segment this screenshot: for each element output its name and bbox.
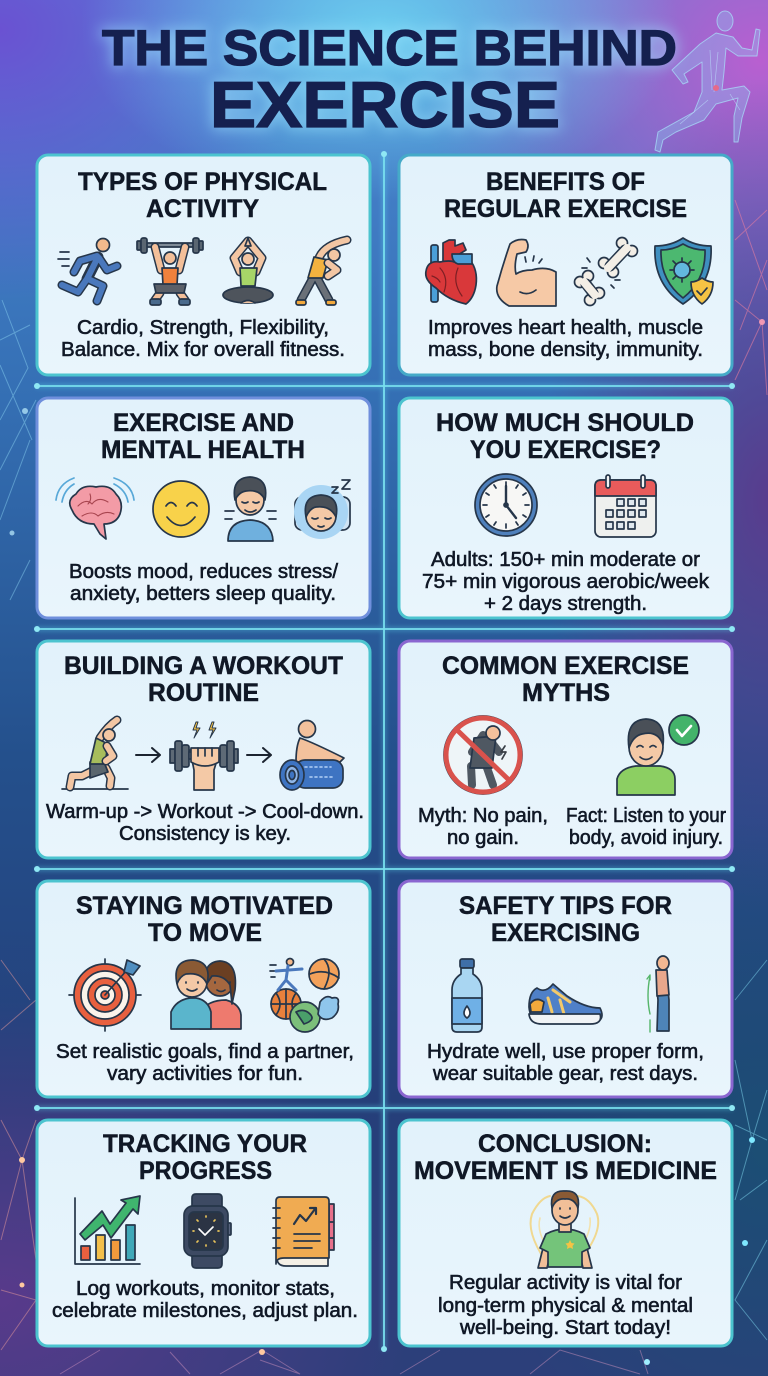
panel: tracking your progress (37, 1120, 370, 1346)
heading: how much: YOU EXERCISE? (470, 436, 661, 464)
panel: benefits of regular exercise (399, 155, 732, 375)
heading: safety tips: SAFETY TIPS FOR (459, 892, 672, 920)
panel: common exercise myths (399, 641, 732, 858)
heading: staying motivated: STAYING MOTIVATED (76, 892, 333, 920)
body text (61, 317, 345, 361)
body text (428, 317, 703, 361)
icon: smiley (153, 481, 209, 537)
body text: myth: Myth: No pain, (418, 805, 548, 827)
icon: varied sports (270, 958, 339, 1032)
heading: staying motivated (76, 892, 333, 947)
icon: water bottle (452, 959, 482, 1032)
title (102, 20, 677, 141)
body text: celebrate milestones, adjust plan. (52, 1300, 358, 1322)
icon: flexed bicep (497, 240, 556, 306)
heading: mental health (101, 409, 305, 464)
panel: safety tips (399, 881, 732, 1097)
icon: brain with waves (56, 478, 134, 539)
heading: mental health: EXERCISE AND (113, 409, 294, 437)
body text: Balance. Mix for overall fitness. (61, 339, 345, 361)
heading: benefits: REGULAR EXERCISE (444, 195, 687, 223)
body text: Boosts mood, reduces stress/ (69, 561, 338, 583)
title: EXERCISE (210, 68, 560, 141)
body text (438, 1272, 693, 1339)
body text: Hydrate well, use proper form, (427, 1041, 704, 1063)
icon: yoga pose (223, 238, 273, 303)
body text: fact: Fact: Listen to your (566, 805, 726, 827)
icon: calendar (595, 475, 656, 537)
icon: sleeping head (294, 480, 350, 539)
body text: Log workouts, monitor stats, (76, 1278, 335, 1300)
panel: building a workout routine (37, 641, 370, 858)
heading: conclusion (414, 1130, 717, 1185)
panel: how much should you exercise (399, 398, 732, 618)
heading: myths: MYTHS (522, 679, 610, 707)
heading: types of physical activity: TYPES OF PHYSICAL (78, 168, 327, 196)
anatomical runner figure (655, 11, 760, 152)
body text (46, 801, 364, 845)
body text: 75+ min vigorous aerobic/week (422, 571, 710, 593)
heading: workout routine: ROUTINE (148, 679, 259, 707)
icon: clock (475, 474, 537, 536)
panel: conclusion (399, 1120, 732, 1346)
icon: foam roller cooldown (280, 720, 344, 790)
body text: fact (566, 805, 726, 849)
heading: tracking: PROGRESS (139, 1157, 272, 1185)
icon: progress chart (75, 1196, 140, 1264)
icon: runner (58, 238, 117, 301)
heading: myths: COMMON EXERCISE (442, 652, 689, 680)
heading: myths (442, 652, 689, 707)
heading: tracking (103, 1130, 307, 1185)
icon: no pain prohibited (444, 716, 522, 794)
panel: exercise and mental health (37, 398, 370, 618)
arrow (136, 748, 160, 762)
icon: side stretch (296, 240, 347, 305)
icon: smartwatch (184, 1194, 231, 1268)
title: THE SCIENCE BEHIND (102, 20, 677, 76)
body text: myth (418, 805, 548, 849)
heading: safety tips: EXERCISING (491, 919, 640, 947)
heading: how much (436, 409, 694, 464)
icon: calm person (225, 477, 276, 541)
icon: progress notebook (273, 1197, 334, 1266)
heading: how much: HOW MUCH SHOULD (436, 409, 694, 437)
heading: mental health: MENTAL HEALTH (101, 436, 305, 464)
icon: happy person with check (617, 715, 699, 795)
body text: mass, bone density, immunity. (428, 339, 703, 361)
body text: long-term physical & mental (438, 1295, 693, 1317)
heading: benefits (444, 168, 687, 223)
body text: fact: body, avoid injury. (569, 827, 723, 849)
icon: running shoe (529, 984, 602, 1024)
panel: staying motivated (37, 881, 370, 1097)
body text (427, 1041, 704, 1085)
body text (52, 1278, 358, 1322)
body text: well-being. Start today! (459, 1317, 671, 1339)
heading: conclusion: MOVEMENT IS MEDICINE (414, 1157, 717, 1185)
icon: workout partners (171, 960, 241, 1029)
icon: target with arrow (69, 959, 141, 1031)
body text: anxiety, betters sleep quality. (70, 583, 336, 605)
body text: Adults: 150+ min moderate or (431, 549, 700, 571)
body text: Consistency is key. (119, 823, 291, 845)
body text (422, 549, 710, 615)
icon: bones (574, 238, 638, 306)
heading: staying motivated: TO MOVE (148, 919, 262, 947)
icon: posture check (647, 956, 669, 1032)
icon: heart (426, 240, 476, 304)
title: EXERCISE (210, 68, 560, 141)
title: THE SCIENCE BEHIND (102, 20, 677, 76)
arrow (247, 748, 271, 762)
body text (56, 1041, 354, 1085)
body text: Cardio, Strength, Flexibility, (77, 317, 329, 339)
heading: conclusion: CONCLUSION: (478, 1130, 652, 1158)
heading: benefits: BENEFITS OF (486, 168, 645, 196)
icon: immunity shield (655, 238, 713, 304)
body text: + 2 days strength. (484, 593, 647, 615)
heading: tracking: TRACKING YOUR (103, 1130, 307, 1158)
body text: Improves heart health, muscle (428, 317, 703, 339)
body text: vary activities for fun. (107, 1063, 303, 1085)
body text (69, 561, 338, 605)
body text: Regular activity is vital for (449, 1272, 682, 1294)
heading: workout routine: BUILDING A WORKOUT (64, 652, 343, 680)
heading: types of physical activity (78, 168, 327, 223)
panel: types of physical activity (37, 155, 370, 375)
heading: workout routine (64, 652, 343, 707)
glowing grid connectors (34, 151, 735, 1352)
heading: safety tips (459, 892, 672, 947)
icon: healthy person with halo (531, 1191, 598, 1268)
body text: Warm-up -> Workout -> Cool-down. (46, 801, 364, 823)
heading: types of physical activity: ACTIVITY (146, 195, 259, 223)
icon: weightlifter (137, 238, 203, 305)
icon: lunge warm-up (62, 720, 128, 789)
body text: Set realistic goals, find a partner, (56, 1041, 354, 1063)
body text: wear suitable gear, rest days. (432, 1063, 698, 1085)
icon: dumbbell in fist (170, 722, 238, 790)
body text: myth: no gain. (447, 827, 519, 849)
